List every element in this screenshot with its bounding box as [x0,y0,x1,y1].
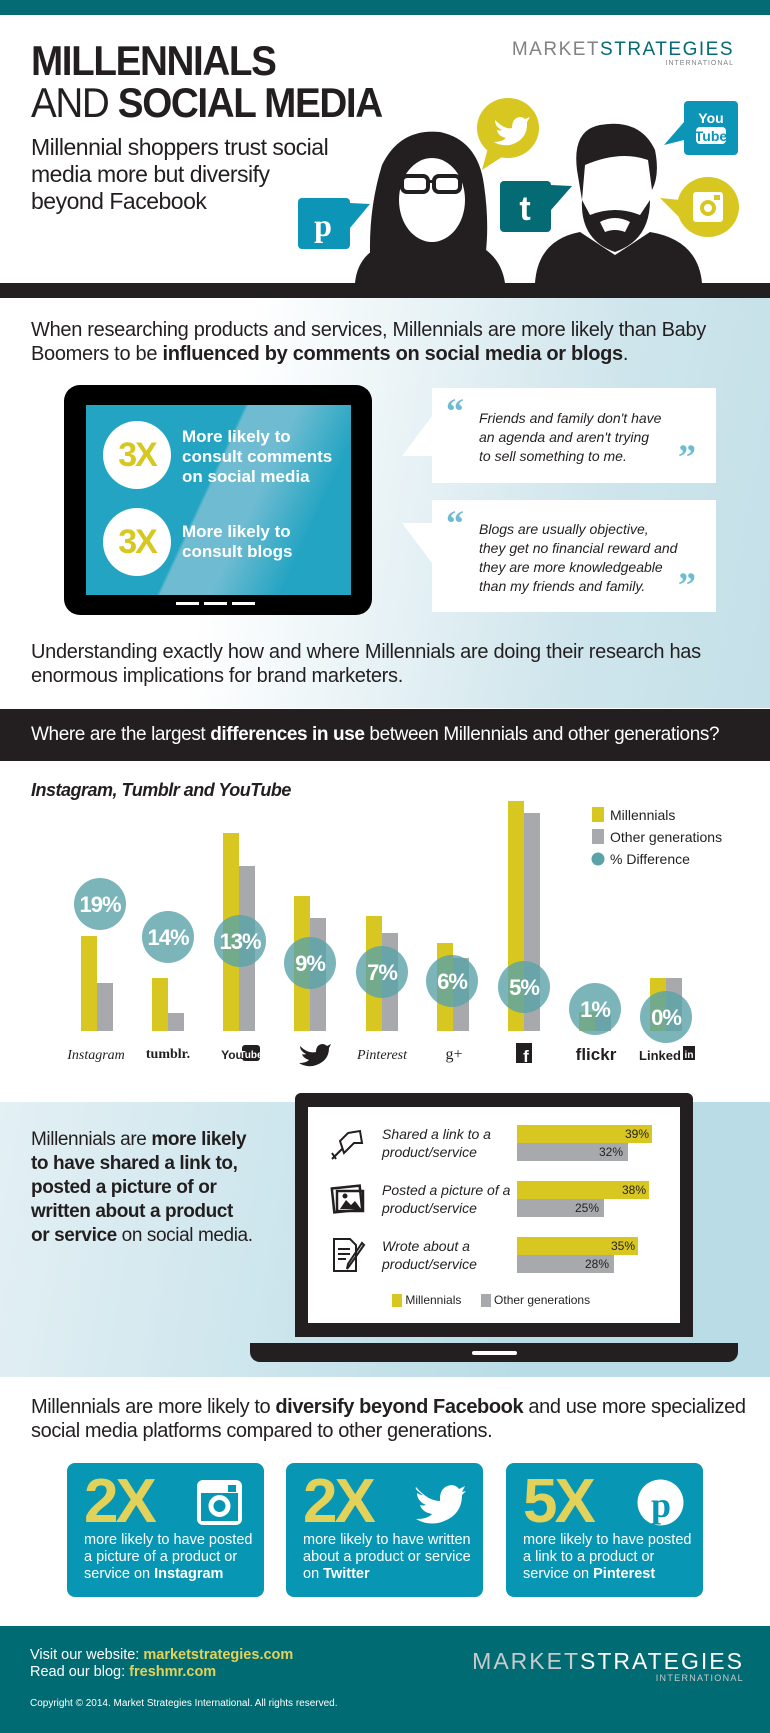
legend: % Difference [610,851,690,867]
quote 2: they get no financial reward and [479,540,677,556]
diversify text: Millennials are more likely to diversify beyond Facebook and use more specialized social media platforms compared to other generations. [31,1396,746,1442]
row: posted picture: Posted a picture of a product/service [382,1182,510,1216]
quote 2: ” [678,565,696,605]
subtitle [31,134,328,214]
black divider bar [0,283,770,298]
icon: youtube bubble: You [698,110,724,126]
row: posted picture [330,1181,649,1217]
bar chart [66,801,722,1066]
quote 1: to sell something to me. [479,448,627,464]
bar chart: 13% [219,929,261,954]
stat: 3X comments: More likely to consult comments on social media [182,427,332,486]
stat: 3X blogs [103,508,292,576]
quote 2: Blogs are usually objective, [479,521,649,537]
copyright: Copyright © 2014. Market Strategies International. All rights reserved. [30,1698,338,1709]
heading band: differences: Where are the largest differences in use between Millennials and other generations? [31,724,719,745]
icon: tumblr bubble: t [519,190,531,228]
bar chart: 1% [580,997,610,1022]
row: posted picture: 25% [575,1201,599,1215]
card: twitter: 2X [303,1467,373,1536]
quote 2: “ [446,503,464,543]
bar chart: 14% [147,925,189,950]
logo header: INTERNATIONAL [666,60,734,67]
title [31,37,382,126]
row: wrote about [333,1237,638,1273]
laptop [250,1093,738,1362]
icon: pinterest bubble [298,198,370,249]
card: twitter [286,1463,483,1597]
footer links [30,1647,293,1680]
row: shared link: 39% [625,1127,649,1141]
platform labels: Tube [239,1050,263,1061]
card: pinterest [506,1463,703,1597]
tablet screen [86,405,351,595]
stat: 3X comments [103,421,332,489]
illustration: people and social bubbles [298,98,739,283]
stat: 3X blogs: 3X [118,523,156,561]
icon: youtube bubble: Tube [695,128,727,144]
platform labels: tumblr. [146,1047,190,1062]
bar chart: 0% [651,1005,681,1030]
quote 2: they are more knowledgeable [479,559,663,575]
quote 1: an agenda and aren't trying [479,429,649,445]
laptop screen chart [308,1107,680,1323]
row: shared link: Shared a link to a product/service [382,1126,491,1160]
card: pinterest: more likely to have posted a link to a product or service on Pinterest [523,1532,691,1582]
bar chart: 19% [79,892,121,917]
row: shared link [331,1125,652,1161]
sharing text [31,1129,253,1246]
stat: 3X comments: 3X [118,436,156,474]
icon: twitter bubble [477,98,539,170]
icon: pinterest bubble: p [314,207,332,243]
card: instagram: more likely to have posted a picture of a product or service on Instagram [84,1532,252,1582]
quote 1: Friends and family don't have [479,410,661,426]
subtitle: beyond Facebook [31,188,206,214]
quote 1: ” [678,437,696,477]
footer [0,1626,770,1733]
icon: instagram bubble [660,177,739,237]
platform labels: You [221,1048,243,1062]
quote 2: than my friends and family. [479,578,645,594]
legend [592,807,722,867]
icon: tumblr bubble [500,181,572,232]
bar chart: 5% [509,975,539,1000]
legend: Millennials [610,807,675,823]
row: wrote about: Wrote about a product/service [382,1238,477,1272]
sharing text: to have shared a link to, [31,1153,237,1174]
footer links: Visit our website: marketstrategies.com [30,1647,293,1663]
card: pinterest: p [651,1485,671,1525]
title: AND SOCIAL MEDIA [31,79,382,126]
woman [355,132,505,283]
footer logo: INTERNATIONAL [656,1673,744,1683]
panel: sharing section [0,1102,770,1377]
quote 1 [432,388,716,483]
card: twitter: more likely to have written about a product or service on Twitter [303,1532,471,1582]
bar chart: 7% [367,960,397,985]
legend: Other generations [610,829,722,845]
row: shared link: 32% [599,1145,623,1159]
card: instagram [67,1463,264,1597]
row: posted picture: 38% [622,1183,646,1197]
sharing text: Millennials are more likely [31,1129,246,1150]
laptop legend: Millennials Other generations [405,1293,590,1307]
platform labels: f [523,1047,529,1066]
platform labels: Pinterest [356,1048,408,1063]
intro text: When researching products and services, Millennials are more likely than Baby Boomers to be influenced by comments on social media or blogs. [31,319,706,365]
sharing text: or service on social media. [31,1225,253,1246]
man [535,124,702,283]
row: wrote about: 35% [611,1239,635,1253]
quote 2 [432,500,716,612]
heading band: differences [0,709,770,761]
platform labels: flickr [576,1045,617,1064]
sharing text: posted a picture of or [31,1177,216,1198]
card: instagram: 2X [84,1467,154,1536]
row: wrote about: 28% [585,1257,609,1271]
platform labels: Linked [639,1048,681,1063]
platform labels: g+ [445,1046,463,1063]
sharing text: written about a product [31,1201,233,1222]
closing text: Understanding exactly how and where Millennials are doing their research has enormous implications for brand marketers. [31,641,701,687]
platform labels: Instagram [66,1048,125,1063]
subtitle: media more but diversify [31,161,270,187]
title: MILLENNIALS [31,37,276,84]
tablet [64,385,372,615]
chart subtitle: Instagram, Tumblr and YouTube [31,780,291,800]
platform labels [66,1043,695,1066]
card: pinterest: 5X [523,1467,593,1536]
stat: 3X blogs: More likely to consult blogs [182,522,292,561]
quote 1: “ [446,391,464,431]
logo header: MARKETSTRATEGIES [512,39,734,60]
subtitle: Millennial shoppers trust social [31,134,328,160]
icon: youtube bubble [664,101,738,155]
bar chart: 6% [437,969,467,994]
footer logo: MARKETSTRATEGIES [472,1648,744,1674]
platform labels: in [685,1050,693,1061]
bar chart: 9% [295,951,325,976]
panel: research section [0,298,770,708]
top teal bar [0,0,770,15]
footer links: Read our blog: freshmr.com [30,1664,216,1680]
